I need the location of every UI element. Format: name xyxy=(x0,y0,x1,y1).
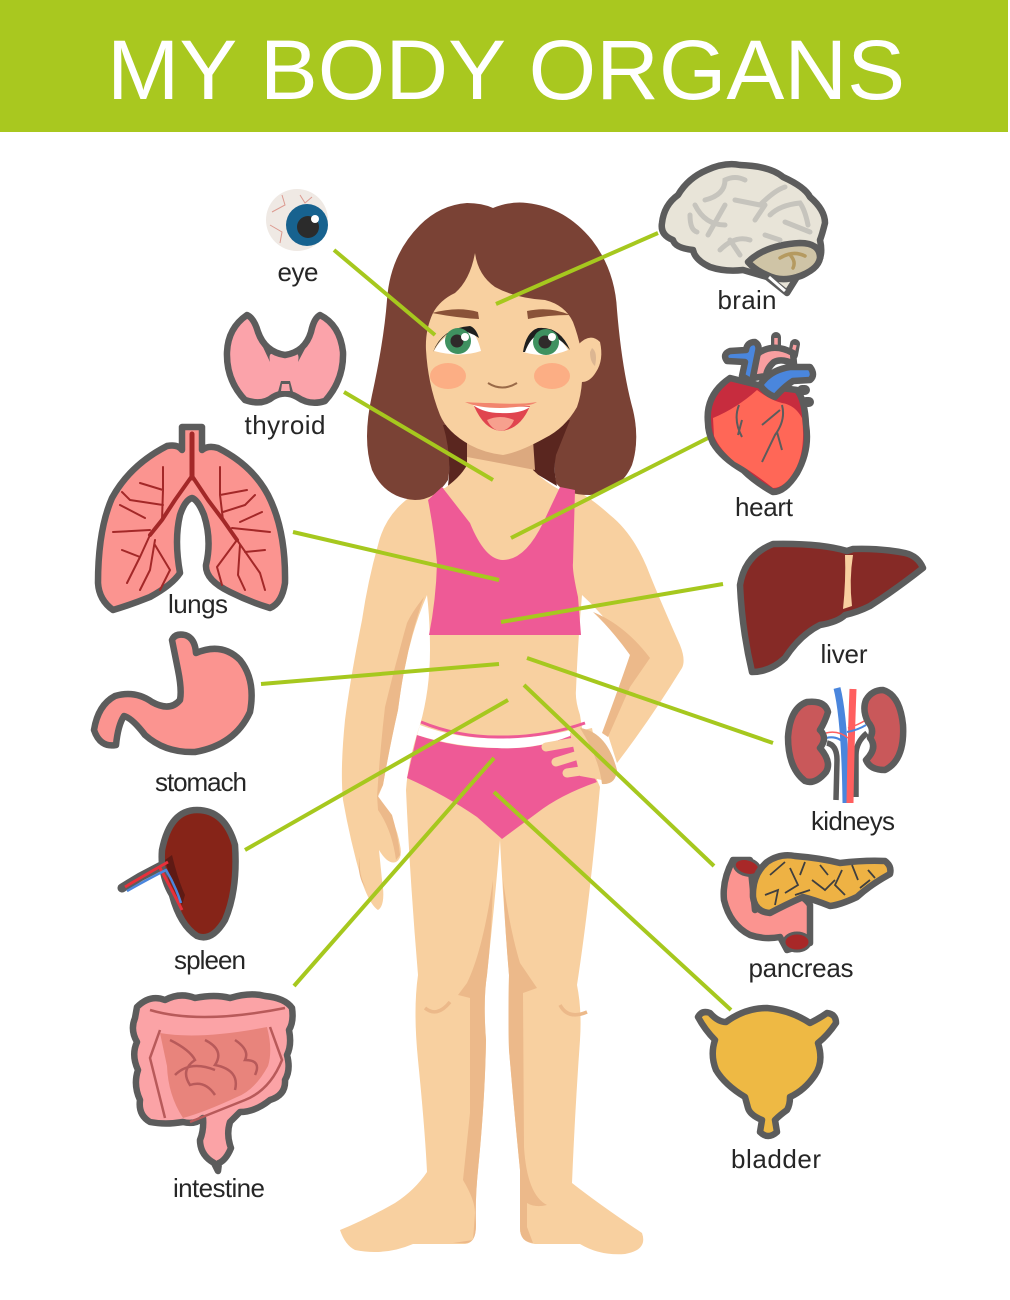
hair xyxy=(367,203,636,500)
title banner: MY BODY ORGANS xyxy=(107,23,905,117)
vessel stubs xyxy=(776,337,809,402)
organ: liver xyxy=(740,544,923,672)
organ: stomach: stomach xyxy=(155,767,247,797)
cerebellum xyxy=(748,243,820,279)
organ: thyroid: thyroid xyxy=(244,410,326,440)
organ: eye xyxy=(266,189,328,287)
face xyxy=(426,253,582,455)
organ: intestine xyxy=(133,994,293,1203)
organ: bladder xyxy=(698,1008,836,1174)
cheeks xyxy=(430,363,466,389)
girl figure xyxy=(340,203,684,1254)
title banner xyxy=(0,0,1008,132)
organ: stomach xyxy=(94,635,252,797)
heart body xyxy=(708,378,807,492)
organ: kidneys: kidneys xyxy=(811,806,895,836)
neck xyxy=(442,440,560,490)
organ: heart: heart xyxy=(735,492,794,522)
connector lines xyxy=(245,233,773,1010)
eyebrows xyxy=(432,309,570,319)
organ: thyroid xyxy=(227,315,343,440)
arm and leg shading xyxy=(359,597,650,1243)
organ: heart xyxy=(708,337,813,522)
organ: pancreas xyxy=(724,855,890,983)
neck shadow xyxy=(467,440,535,470)
nose xyxy=(488,383,517,388)
organ: lungs xyxy=(98,427,285,619)
pink underwear xyxy=(407,722,597,839)
ear xyxy=(578,338,601,382)
body skin xyxy=(340,488,684,1254)
aorta arch xyxy=(752,348,794,378)
organ: lungs: lungs xyxy=(168,589,228,619)
organ: liver: liver xyxy=(820,639,868,669)
organ: brain xyxy=(662,164,825,315)
pulmonary artery xyxy=(760,367,813,397)
mouth xyxy=(465,402,537,431)
bronchi xyxy=(113,434,270,590)
organ: spleen xyxy=(122,810,246,975)
organ: pancreas: pancreas xyxy=(748,953,854,983)
organ: eye: eye xyxy=(278,257,318,287)
organ: bladder: bladder xyxy=(731,1144,821,1174)
small intestine xyxy=(160,1027,270,1118)
organ: kidneys xyxy=(788,688,903,836)
back hair xyxy=(443,420,570,486)
organ: brain: brain xyxy=(718,285,776,315)
right eye xyxy=(523,328,570,355)
pink top xyxy=(428,487,581,635)
knees xyxy=(425,1002,587,1015)
left eye xyxy=(433,326,481,354)
vena cava xyxy=(725,342,759,382)
hand xyxy=(546,728,617,784)
brain folds xyxy=(690,178,810,255)
organ: spleen: spleen xyxy=(174,945,246,975)
organ: intestine: intestine xyxy=(173,1173,265,1203)
